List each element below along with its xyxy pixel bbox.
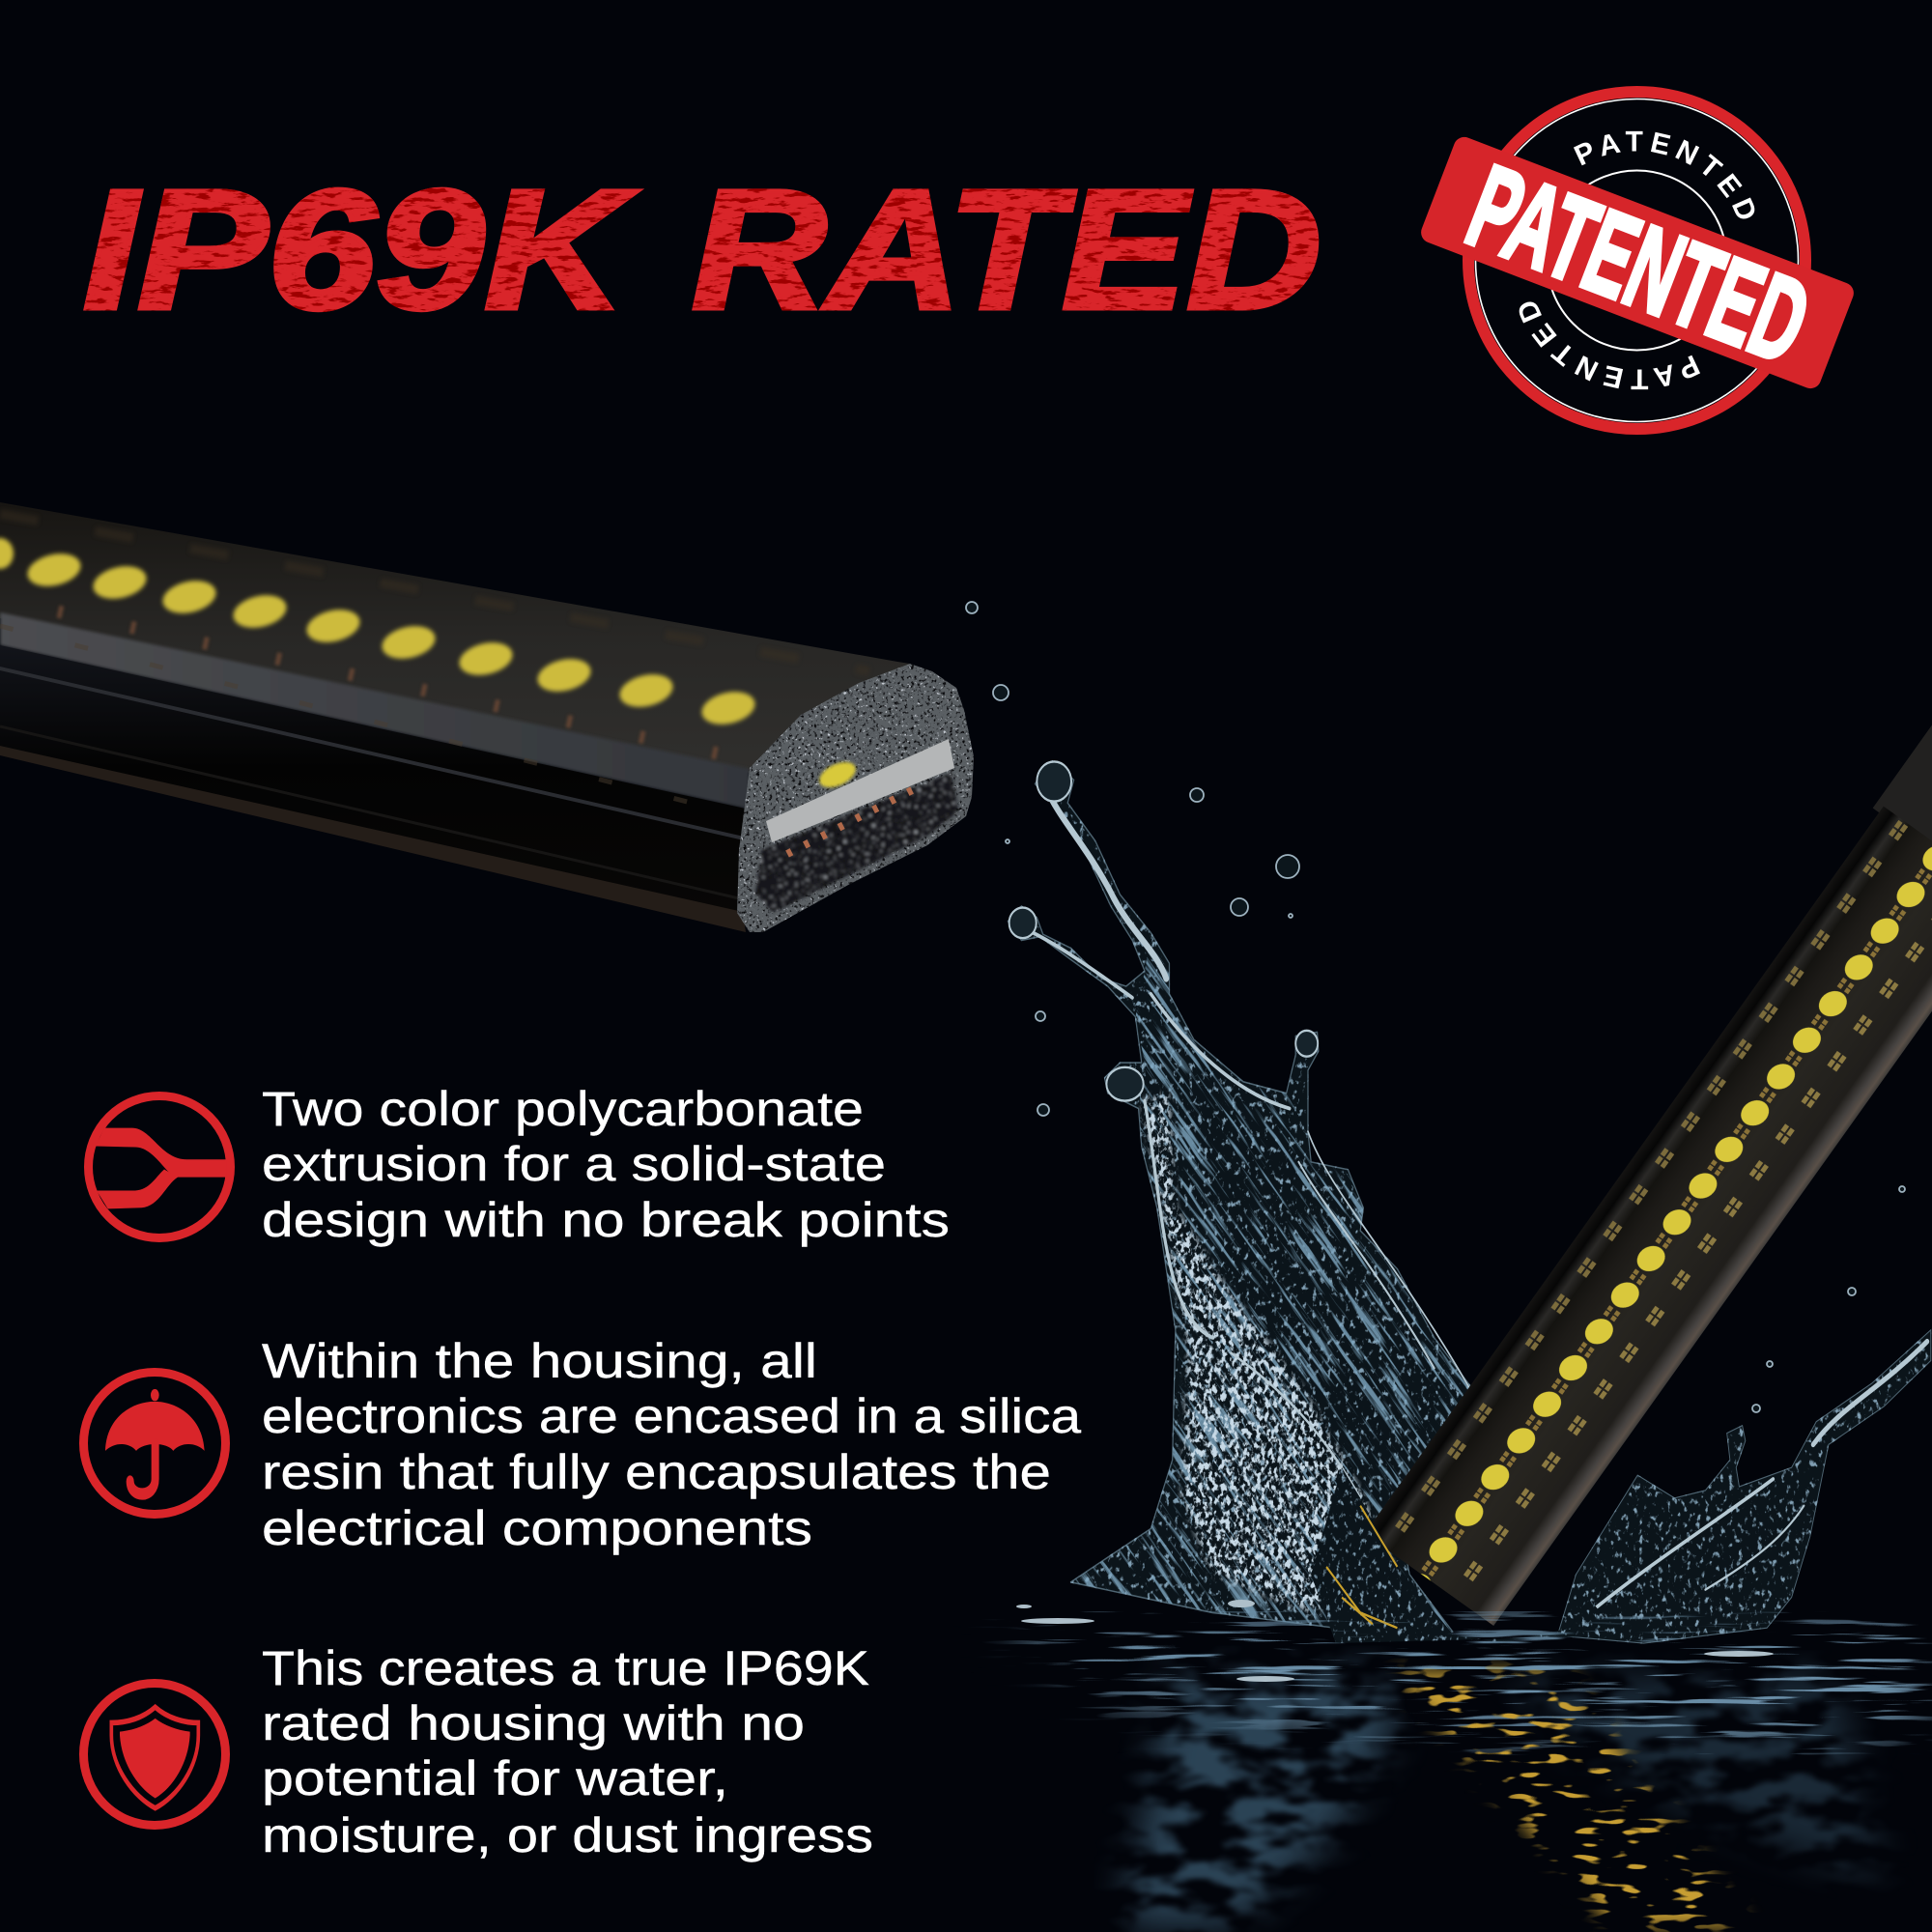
text: silica resin: Within the housing, all — [262, 1334, 817, 1388]
blurred reflection right — [1507, 1671, 1884, 1884]
LED strip — [1353, 799, 1932, 1627]
text: extrusion: extrusion for a solid-state — [262, 1137, 886, 1191]
water ripples — [995, 1618, 1927, 1748]
splash edge lines — [1009, 761, 1471, 1498]
title: IP69K RATED — [83, 156, 1321, 345]
icon: two-color extrusion merge — [89, 1095, 230, 1238]
LED bar: angled in water — [1353, 647, 1932, 1627]
text: no ingress: potential for water, — [262, 1751, 728, 1805]
bar body — [1365, 807, 1932, 1626]
yellow LEDs — [0, 538, 758, 729]
patented stamp badge — [1421, 86, 1854, 435]
stamp ring — [1468, 92, 1805, 429]
bar body — [0, 502, 910, 932]
text: silica resin: resin that fully encapsulates the — [262, 1445, 1051, 1499]
surface highlights — [1016, 1600, 1774, 1682]
curved text bottom: PATENTED — [1519, 301, 1700, 390]
red banner with PATENTED — [1414, 126, 1860, 402]
title: IP69K RATED: RATED — [692, 156, 1321, 345]
blurred reflection left — [1121, 1671, 1401, 1927]
text: no ingress — [262, 1641, 873, 1862]
LED bar: cut end product photo — [0, 502, 974, 932]
right splash — [1557, 1330, 1931, 1643]
text: no ingress: rated housing with no — [262, 1696, 805, 1750]
splash over bar base — [1311, 1467, 1619, 1643]
text: no ingress: moisture, or dust ingress — [262, 1808, 873, 1862]
icon: shield — [83, 1683, 226, 1826]
gold LED reflection — [1391, 1671, 1748, 1927]
text: no ingress: This creates a true IP69K — [262, 1641, 869, 1695]
bright splash highlights — [1142, 1094, 1397, 1612]
icon: umbrella — [83, 1372, 226, 1515]
text: extrusion: design with no break points — [262, 1193, 950, 1247]
water splash foreground and surface — [995, 1467, 1927, 1927]
cut end cross-section — [737, 664, 974, 932]
curved text top: PATENTED — [1574, 131, 1754, 218]
text: extrusion — [262, 1082, 950, 1247]
connector end — [1873, 651, 1932, 895]
water droplets — [966, 602, 1905, 1412]
text: silica resin: electronics are encased in a silica — [262, 1389, 1081, 1443]
water splash behind bar — [583, 535, 1931, 1880]
diagonal water streaks — [1075, 951, 1468, 1632]
text: silica resin — [262, 1334, 1081, 1555]
text: silica resin: electrical components — [262, 1501, 812, 1555]
title: IP69K RATED: IP69K — [83, 156, 637, 345]
left splash tower — [1008, 761, 1471, 1632]
text: extrusion: Two color polycarbonate — [262, 1082, 864, 1136]
